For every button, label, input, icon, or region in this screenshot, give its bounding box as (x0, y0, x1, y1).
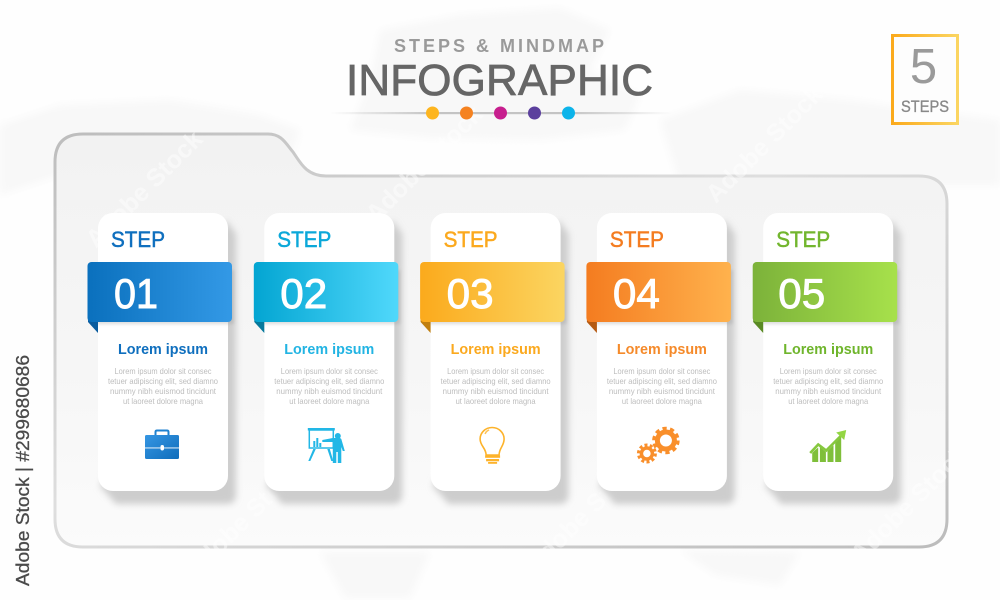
number: 02 (280, 270, 327, 317)
badge: 5 steps (892, 36, 958, 124)
card shadow (599, 220, 735, 504)
card shadow (100, 220, 236, 504)
ribbon fold (254, 318, 264, 333)
body text (441, 366, 551, 406)
card body (264, 213, 394, 491)
body text: tetuer adipiscing elit, sed diamno (274, 376, 385, 386)
heading: Lorem ipsum (284, 342, 374, 358)
step 4 card (586, 213, 735, 504)
step label: STEP (776, 227, 830, 252)
step label: STEP (610, 227, 664, 252)
heading: Lorem ipsum (451, 342, 541, 358)
icon: growth chart (810, 430, 846, 462)
panel: folder frame (55, 134, 947, 547)
body text (607, 366, 717, 406)
body text (274, 366, 385, 406)
ribbon shadow (595, 270, 733, 324)
icon: light bulb (480, 428, 504, 464)
step 1 card (88, 213, 236, 504)
body text: ut laoreet dolore magna (788, 396, 869, 406)
body text: nummy nibh euismod tincidunt (609, 386, 716, 396)
number: 01 (114, 270, 158, 317)
badge: 5 steps: 5 (910, 40, 937, 94)
step 3 card (420, 213, 569, 504)
icon: presenter at board (308, 428, 345, 463)
number: 04 (613, 270, 660, 317)
badge: 5 steps: STEPS (901, 97, 949, 116)
body text: tetuer adipiscing elit, sed diamno (441, 376, 551, 386)
card shadow (433, 220, 569, 504)
ribbon shadow (262, 270, 400, 324)
watermark pattern: Adobe Stock (80, 125, 208, 253)
watermark pattern: Adobe Stock (360, 100, 488, 228)
ribbon (254, 262, 398, 322)
card body (763, 213, 893, 491)
main title: INFOGRAPHIC (346, 56, 653, 105)
ribbon shadow (96, 270, 234, 324)
title block (330, 36, 672, 120)
ribbon (88, 262, 232, 322)
step label: STEP (277, 227, 331, 252)
body text: Lorem ipsum dolor sit consec (114, 366, 212, 376)
ribbon fold (753, 318, 763, 333)
body text: Lorem ipsum dolor sit consec (447, 366, 544, 376)
ribbon (420, 262, 565, 322)
body text: ut laoreet dolore magna (289, 396, 370, 406)
title divider with dots (330, 106, 672, 120)
watermark pattern: Adobe Stock (180, 455, 308, 583)
watermark pattern: Adobe Stock (700, 80, 828, 208)
ribbon fold (587, 318, 597, 333)
ribbon (586, 262, 731, 322)
body text (773, 366, 884, 406)
body text: tetuer adipiscing elit, sed diamno (108, 376, 218, 386)
ribbon shadow (761, 270, 899, 324)
body text (108, 366, 218, 406)
watermark pattern: Adobe Stock (845, 440, 973, 568)
body text: nummy nibh euismod tincidunt (110, 386, 217, 396)
icon: briefcase (145, 430, 179, 459)
card shadow (266, 220, 402, 504)
subtitle: STEPS & MINDMAP (394, 36, 604, 56)
watermark pattern: Adobe (2, 7, 77, 82)
body text: Lorem ipsum dolor sit consec (613, 366, 710, 376)
watermark credit: Adobe Stock | #299680686 (12, 355, 33, 586)
body text: nummy nibh euismod tincidunt (775, 386, 882, 396)
step 2 card (254, 213, 402, 504)
body text: Lorem ipsum dolor sit consec (281, 366, 378, 376)
card body (431, 213, 561, 491)
ribbon fold (421, 318, 431, 333)
body text: ut laoreet dolore magna (123, 396, 203, 406)
body text: nummy nibh euismod tincidunt (276, 386, 383, 396)
heading: Lorem ipsum (617, 342, 707, 358)
body text: Lorem ipsum dolor sit consec (780, 366, 877, 376)
card body (98, 213, 228, 491)
ribbon fold (88, 318, 98, 333)
body text: tetuer adipiscing elit, sed diamno (607, 376, 717, 386)
icon: gears (638, 428, 678, 462)
card body (597, 213, 727, 491)
heading: Lorem ipsum (783, 342, 873, 358)
body text: nummy nibh euismod tincidunt (443, 386, 549, 396)
body text: tetuer adipiscing elit, sed diamno (773, 376, 884, 386)
step 5 card (753, 213, 901, 504)
body text: ut laoreet dolore magna (456, 396, 536, 406)
body text: ut laoreet dolore magna (622, 396, 702, 406)
step label: STEP (444, 227, 498, 252)
ribbon (753, 262, 897, 322)
number: 05 (778, 270, 825, 317)
ribbon shadow (429, 270, 567, 324)
heading: Lorem ipsum (118, 342, 208, 358)
number: 03 (447, 270, 494, 317)
card shadow (765, 220, 901, 504)
watermark pattern: Adobe Stock (520, 450, 648, 578)
step label: STEP (111, 227, 165, 252)
